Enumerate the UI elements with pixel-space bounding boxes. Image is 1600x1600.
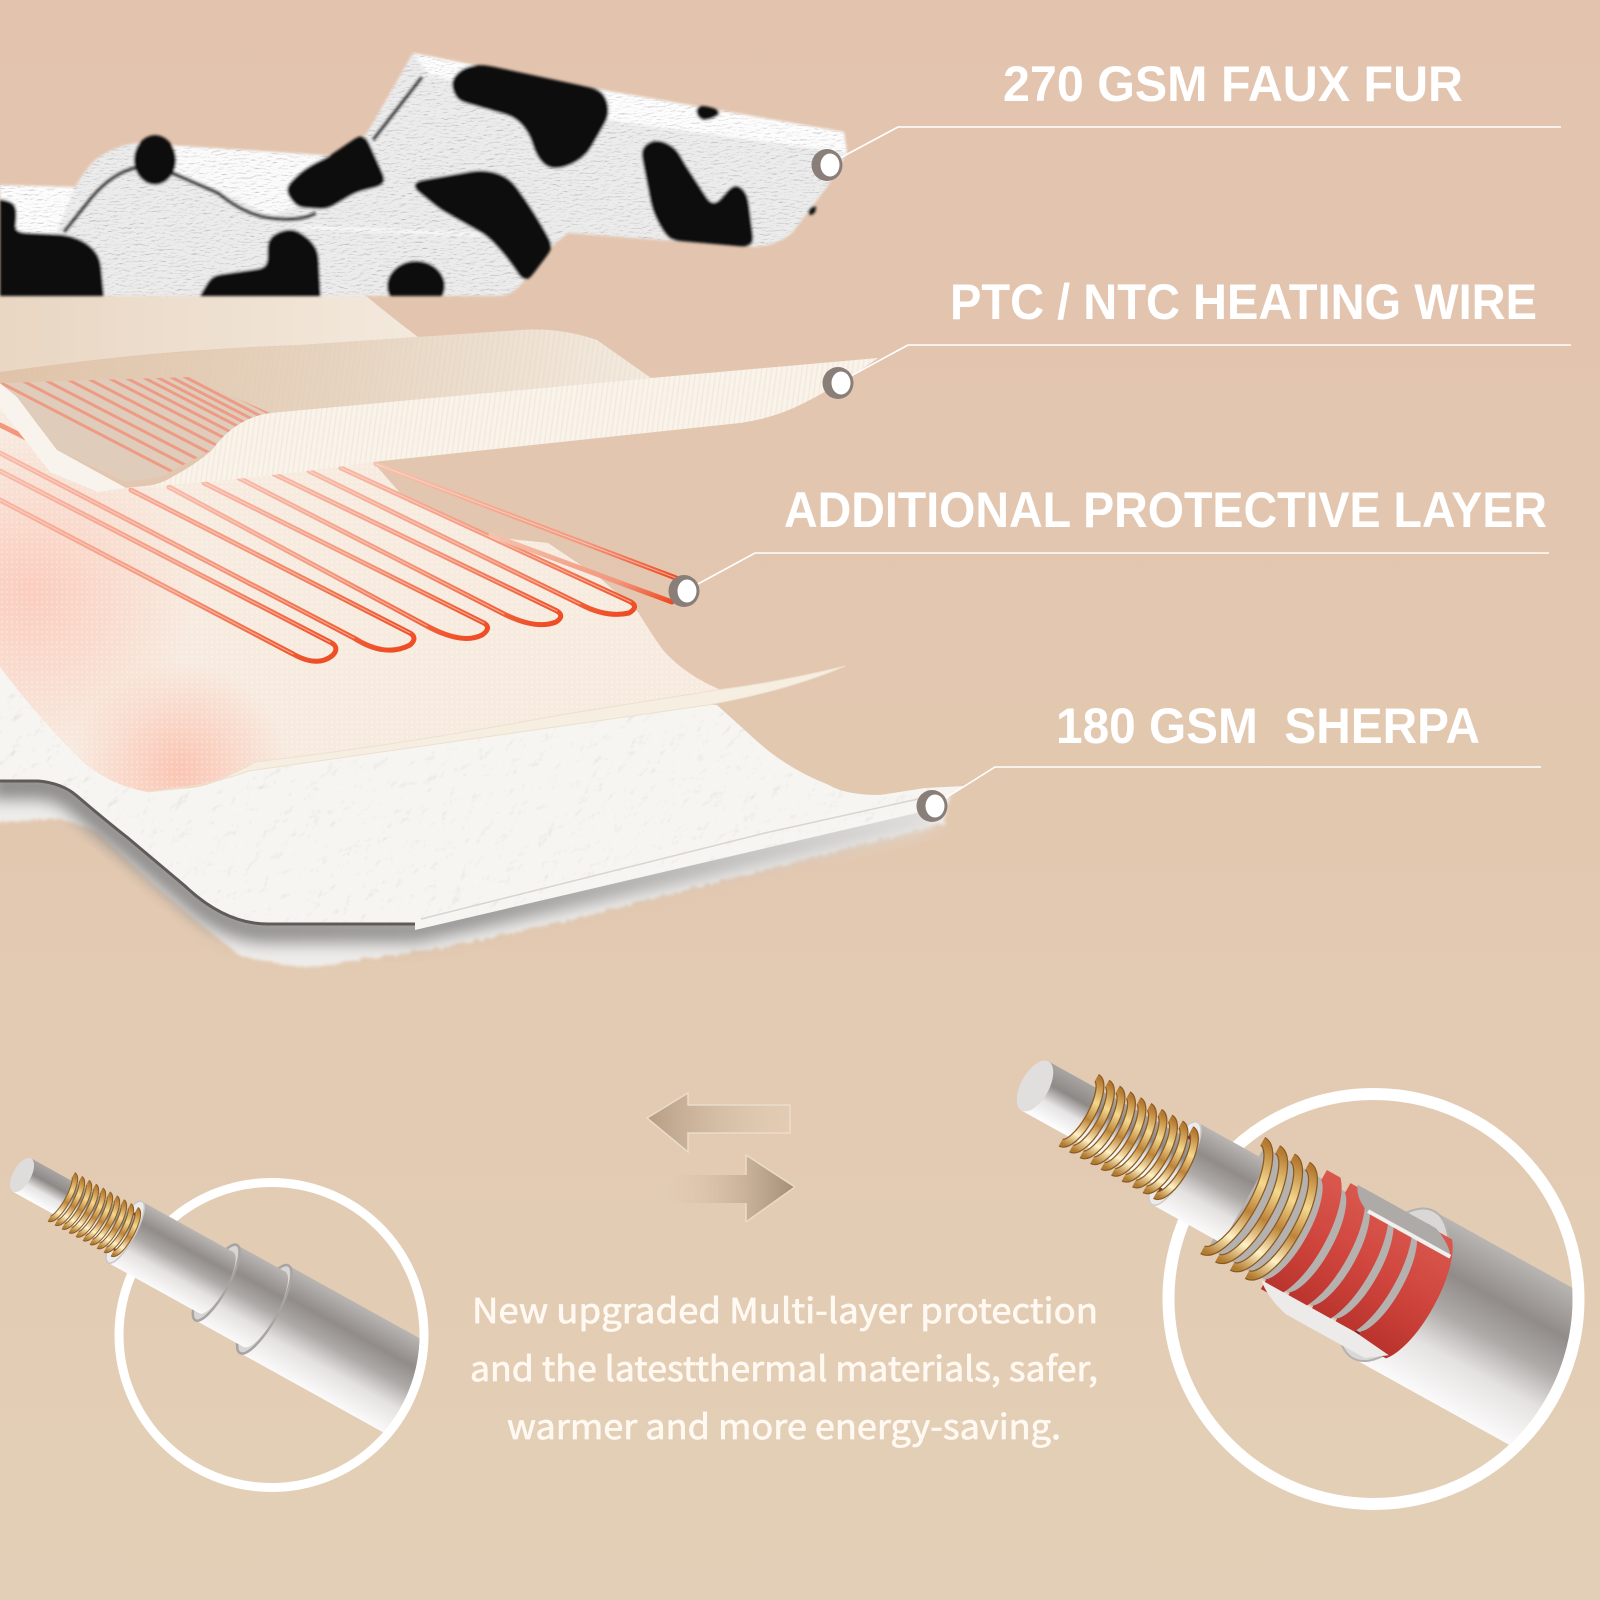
magnifier ring: right (1168, 1094, 1578, 1504)
callout: 180 GSM sherpa (916, 698, 1541, 822)
callout: 270 GSM faux fur (812, 56, 1561, 181)
text: description: warmer and more energy-saving. (507, 1400, 1061, 1449)
callout: additional protective layer (668, 482, 1549, 607)
fold with faded wires (0, 377, 270, 492)
cable: original wire (10, 1158, 420, 1432)
text: description: and the latestthermal materials, safer, (470, 1342, 1098, 1391)
arrow: right (661, 1155, 795, 1222)
arrow: left (647, 1093, 790, 1152)
text: description (470, 1284, 1098, 1449)
callout: 270 GSM faux fur: 270 GSM FAUX FUR (1003, 56, 1463, 112)
callout: PTC / NTC heating wire (822, 274, 1571, 399)
layer: upper beige film (0, 295, 418, 372)
layer: 180 GSM sherpa (0, 667, 965, 968)
text: description: New upgraded Multi-layer protection (472, 1284, 1098, 1333)
callout: additional protective layer: ADDITIONAL PROTECTIVE LAYER (784, 482, 1547, 538)
callout: PTC / NTC heating wire: PTC / NTC HEATING WIRE (950, 274, 1537, 330)
layer: PTC / NTC film back (0, 329, 651, 413)
callout: 180 GSM sherpa: 180 GSM SHERPA (1056, 698, 1480, 754)
layer: PTC / NTC film front (126, 358, 878, 488)
cable: upgraded multi-layer wire (1016, 1060, 1572, 1445)
magnifier ring: left (119, 1182, 424, 1488)
layer: heating sheet (0, 395, 721, 792)
layer: 270 GSM faux fur (0, 53, 847, 311)
layer: additional protective layer (147, 666, 845, 792)
heating wires (0, 405, 676, 661)
